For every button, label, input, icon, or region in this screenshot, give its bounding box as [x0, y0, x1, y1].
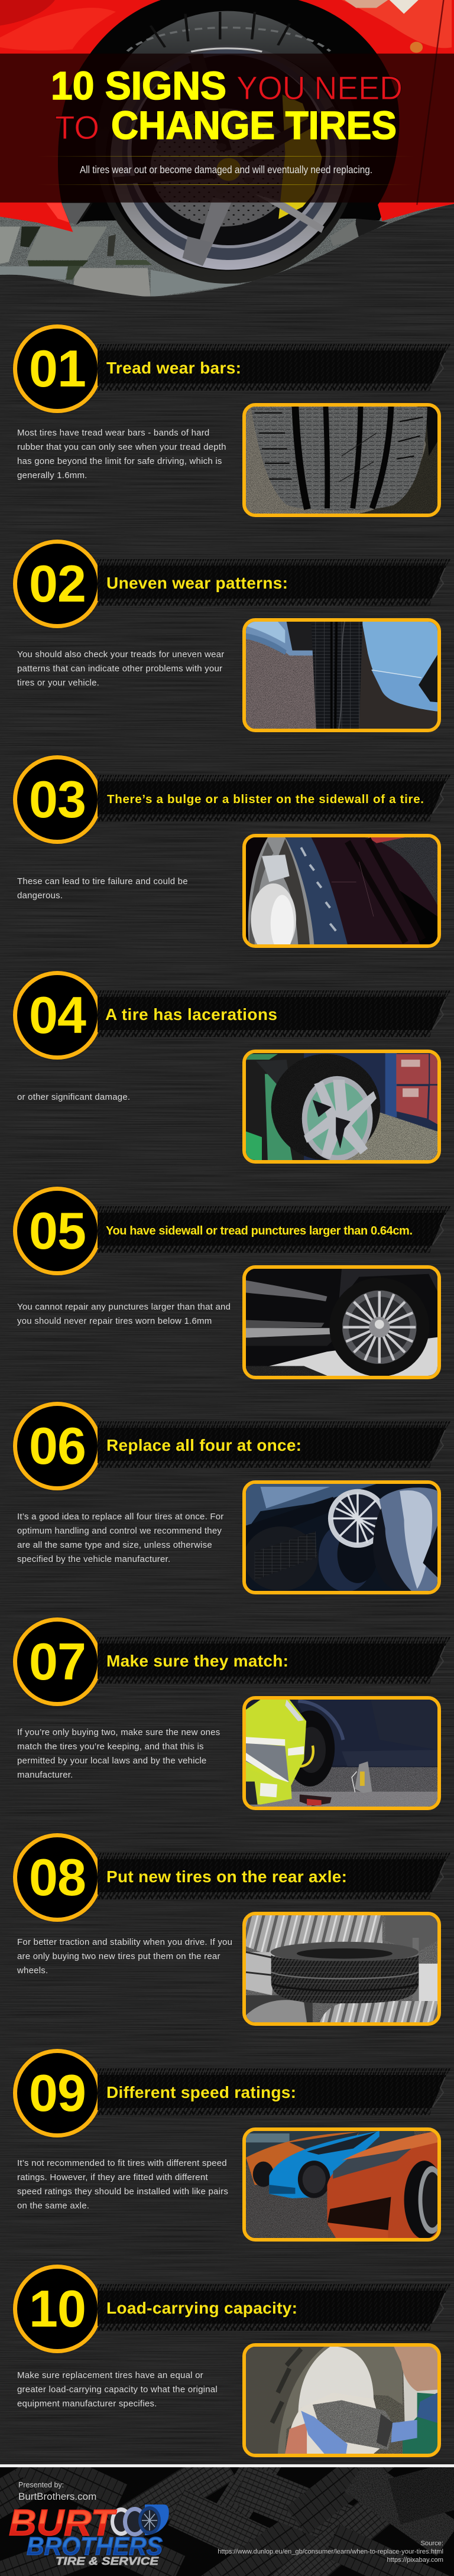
photo: stacked new tires: [242, 1912, 441, 2026]
text: [17, 876, 188, 901]
photo: row of coloured cars: [242, 2127, 441, 2242]
photo: stack of tires and rims: [242, 1480, 441, 1594]
text: speed ratings they should be installed with like pairs: [17, 2187, 228, 2197]
text: or other significant damage.: [17, 1092, 130, 1102]
text: [17, 1727, 220, 1780]
heading band: [98, 1206, 450, 1253]
subtitle: All tires wear out or become damaged and will eventually need replacing.: [80, 164, 372, 176]
text: specified by the vehicle manufacturer.: [17, 1554, 170, 1564]
text: Most tires have tread wear bars - bands of hard: [17, 428, 209, 438]
title: 10 SIGNS: [51, 64, 226, 108]
section 06: [13, 1402, 450, 1594]
photo: sidewall bulge: [242, 834, 441, 948]
text: tires or your vehicle.: [17, 678, 99, 688]
brake disc: [151, 108, 296, 226]
sources: [218, 2540, 443, 2564]
number badge: 08: [29, 1848, 86, 1906]
text: For better traction and stability when you drive. If you: [17, 1937, 232, 1947]
logo: Burt Brothers: BROTHERS: [27, 2532, 163, 2561]
section 10: [13, 2265, 450, 2457]
heading band: [98, 775, 450, 821]
number badge: 06: [29, 1417, 86, 1475]
text: equipment manufacturer specifies.: [17, 2399, 157, 2409]
number badge: 02: [29, 554, 86, 613]
sources: https://pixabay.com: [387, 2556, 443, 2564]
text: [17, 649, 224, 688]
section 05: [13, 1187, 450, 1379]
number badge: 09: [29, 2064, 86, 2122]
heading band: [98, 1421, 450, 1468]
section 03: [13, 755, 450, 948]
sources: Source:: [420, 2540, 443, 2547]
heading band: [98, 559, 450, 606]
heading band: You have sidewall or tread punctures larger than 0.64cm.: [106, 1224, 413, 1237]
text: rubber that you can only see when your tread depth: [17, 442, 226, 452]
photo: mechanic with impact wrench: [242, 2343, 441, 2457]
red bodywork right: [298, 0, 454, 221]
heading band: Different speed ratings:: [106, 2083, 296, 2101]
text: [17, 1937, 232, 1976]
text: wheels.: [17, 1966, 48, 1976]
text: on the same axle.: [17, 2201, 89, 2211]
photo: red sports car wheel: [0, 0, 454, 297]
number badge: 05: [29, 1201, 86, 1260]
text: It’s not recommended to fit tires with different speed: [17, 2158, 227, 2168]
number badge: [13, 324, 102, 413]
logo: Burt Brothers: TIRE & SERVICE: [56, 2555, 159, 2567]
logo: Burt Brothers: [9, 2503, 169, 2567]
text: Make sure replacement tires have an equal or: [17, 2370, 203, 2380]
number badge: 01: [29, 339, 86, 398]
section 08: [13, 1833, 450, 2026]
heading band: Put new tires on the rear axle:: [106, 1867, 347, 1886]
white divider: [0, 2464, 454, 2467]
text: optimum handling and control we recommend they: [17, 1526, 222, 1536]
heading band: [98, 1637, 450, 1684]
heading band: [98, 2284, 450, 2331]
heading band: There’s a bulge or a blister on the sidewall of a tire.: [107, 792, 424, 806]
photo: blue car tire: [242, 618, 441, 732]
rim: [116, 59, 342, 271]
photo: worn tread: [242, 403, 441, 517]
text: You should also check your treads for uneven wear: [17, 649, 224, 660]
title: CHANGE TIRES: [111, 103, 397, 148]
text: You cannot repair any punctures larger than that and: [17, 1302, 231, 1312]
text: match the tires you’re keeping, and that this is: [17, 1742, 204, 1752]
tyre: [96, 11, 359, 284]
text: If you’re only buying two, make sure the new ones: [17, 1727, 220, 1737]
footer: [0, 2464, 454, 2576]
number badge: [13, 540, 102, 628]
wheel arch: [57, 0, 401, 223]
photo: black car with alloy wheel: [242, 1265, 441, 1379]
number badge: [13, 2049, 102, 2138]
presented by: Presented by:: [18, 2481, 64, 2489]
number badge: 07: [29, 1632, 86, 1691]
text: These can lead to tire failure and could be: [17, 876, 188, 886]
text: [17, 1512, 224, 1564]
background: woven tires: [0, 2467, 454, 2576]
section 09: [13, 2048, 450, 2242]
section 01: [13, 324, 450, 517]
heading band: Uneven wear patterns:: [106, 574, 288, 592]
photo: damaged tire on balancer: [242, 1050, 441, 1164]
heading band: Tread wear bars:: [106, 359, 241, 377]
number badge: [13, 2265, 102, 2353]
heading band: [98, 2068, 450, 2115]
yellow caliper: [278, 95, 322, 219]
photo: mechanic in hi-vis fitting wheel: [242, 1696, 441, 1810]
number badge: [13, 1187, 102, 1275]
sources: https://www.dunlop.eu/en_gb/consumer/learn/when-to-replace-your-tires.html: [218, 2548, 443, 2555]
number badge: [13, 1617, 102, 1706]
text: [17, 1302, 231, 1326]
section 04: [13, 970, 450, 1164]
hero photo: red car wheel with title band: [0, 0, 454, 297]
heading band: A tire has lacerations: [105, 1005, 277, 1024]
section 02: [13, 539, 450, 732]
text: manufacturer.: [17, 1770, 73, 1780]
text: It’s a good idea to replace all four tires at once. For: [17, 1512, 224, 1522]
heading band: Make sure they match:: [106, 1652, 288, 1670]
red bodywork left: [0, 0, 161, 232]
logo: Burt Brothers: BURT: [9, 2503, 117, 2543]
text: are only buying two new tires put them on the rear: [17, 1951, 220, 1961]
spokes: [238, 106, 339, 163]
text: [17, 2370, 218, 2409]
text: dangerous.: [17, 891, 63, 901]
number badge: [13, 1402, 102, 1490]
text: [17, 2158, 228, 2211]
number badge: 04: [29, 986, 86, 1044]
number badge: 03: [29, 770, 86, 829]
website: BurtBrothers.com: [18, 2491, 96, 2502]
heading band: [98, 1853, 450, 1899]
number badge: 10: [29, 2279, 86, 2338]
text: patterns that can indicate other problems with your: [17, 664, 222, 674]
number badge: [13, 971, 102, 1060]
text: greater load-carrying capacity to what the original: [17, 2385, 218, 2395]
text: ratings. However, if they are fitted with different: [17, 2172, 208, 2182]
text: [17, 428, 226, 480]
title band: [0, 54, 454, 203]
heading band: [98, 344, 450, 391]
text: permitted by your local laws and by the vehicle: [17, 1756, 207, 1766]
title: YOU NEED: [236, 69, 403, 106]
number badge: [13, 755, 102, 844]
text: are all the same type and size, unless otherwise: [17, 1540, 212, 1550]
title: TO: [55, 109, 99, 146]
title: [51, 64, 403, 148]
number badge: [13, 1833, 102, 1922]
heading band: Load-carrying capacity:: [106, 2299, 297, 2317]
heading band: [98, 990, 450, 1037]
text: has gone beyond the limit for safe driving, which is: [17, 456, 222, 466]
heading band: Replace all four at once:: [106, 1436, 301, 1454]
text: you should never repair tires worn below 1.6mm: [17, 1316, 212, 1326]
logo wheels: [111, 2504, 169, 2536]
text: generally 1.6mm.: [17, 470, 87, 480]
section 07: [13, 1617, 450, 1810]
